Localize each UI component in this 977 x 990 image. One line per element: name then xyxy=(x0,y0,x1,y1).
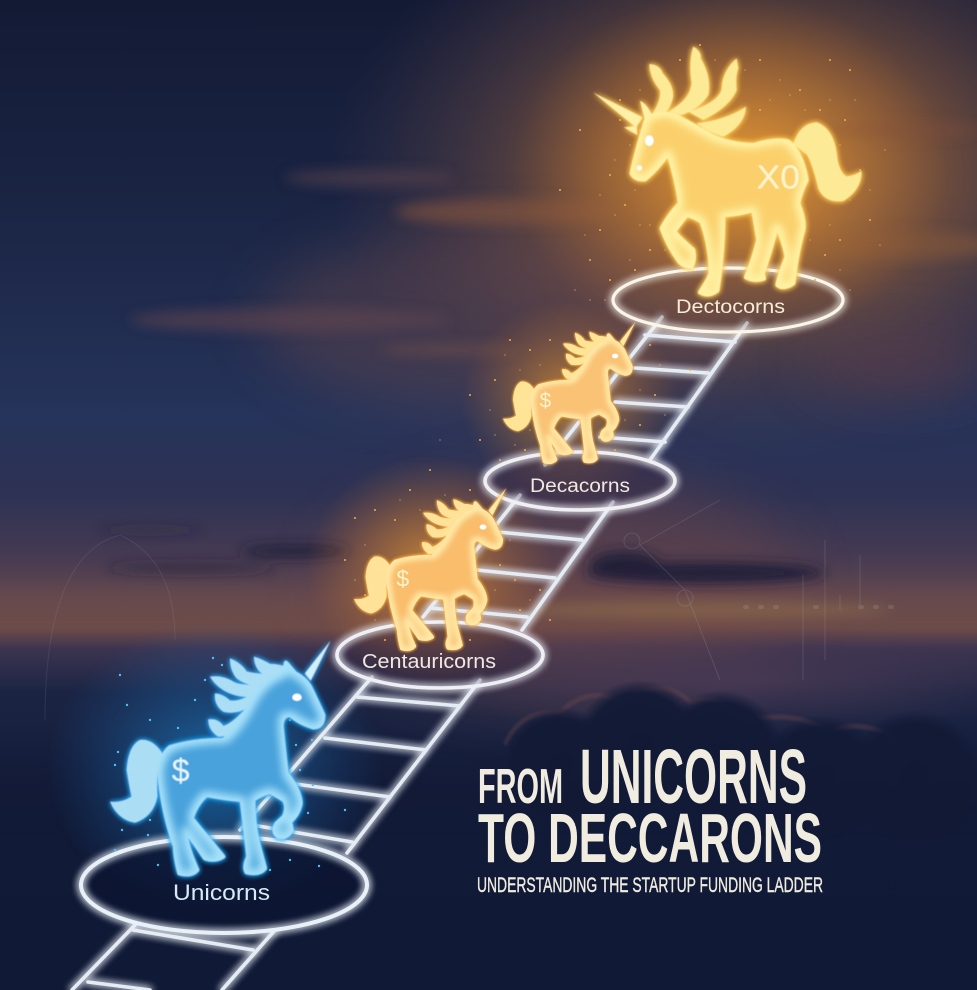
multiplier mark: X0 xyxy=(757,159,800,196)
title block xyxy=(477,734,823,897)
label: Decacorns: Decacorns xyxy=(530,476,630,497)
platform: centauricorns xyxy=(337,622,543,688)
glow: dectocorn xyxy=(510,0,950,350)
glow: centauricorn xyxy=(305,455,555,685)
unicorn: dectocorn xyxy=(593,47,862,294)
glow: blue unicorn xyxy=(45,620,385,920)
dollar mark: $ xyxy=(396,565,409,591)
platform: decacorns xyxy=(485,452,675,510)
platform: dectocorns xyxy=(613,268,843,332)
unicorn: centauricorn xyxy=(354,488,506,649)
platform: unicorns xyxy=(81,837,367,933)
sparkles: blue xyxy=(115,658,345,870)
cloud bank xyxy=(0,680,977,990)
label: Dectocorns: Dectocorns xyxy=(676,297,785,318)
glow: decacorn xyxy=(460,300,680,500)
unicorn: decacorn xyxy=(503,322,635,462)
title line 1 small: FROM xyxy=(478,760,563,814)
dollar mark: $ xyxy=(172,753,190,789)
dollar mark: $ xyxy=(540,390,552,413)
sparkles: gold xyxy=(345,45,870,640)
label: Unicorns: Unicorns xyxy=(173,880,270,905)
faint data lines and nodes xyxy=(45,500,892,720)
unicorn: blue xyxy=(110,641,331,874)
label: Centauricorns: Centauricorns xyxy=(362,651,496,673)
gold dust xyxy=(355,60,885,620)
ladder xyxy=(72,317,747,990)
